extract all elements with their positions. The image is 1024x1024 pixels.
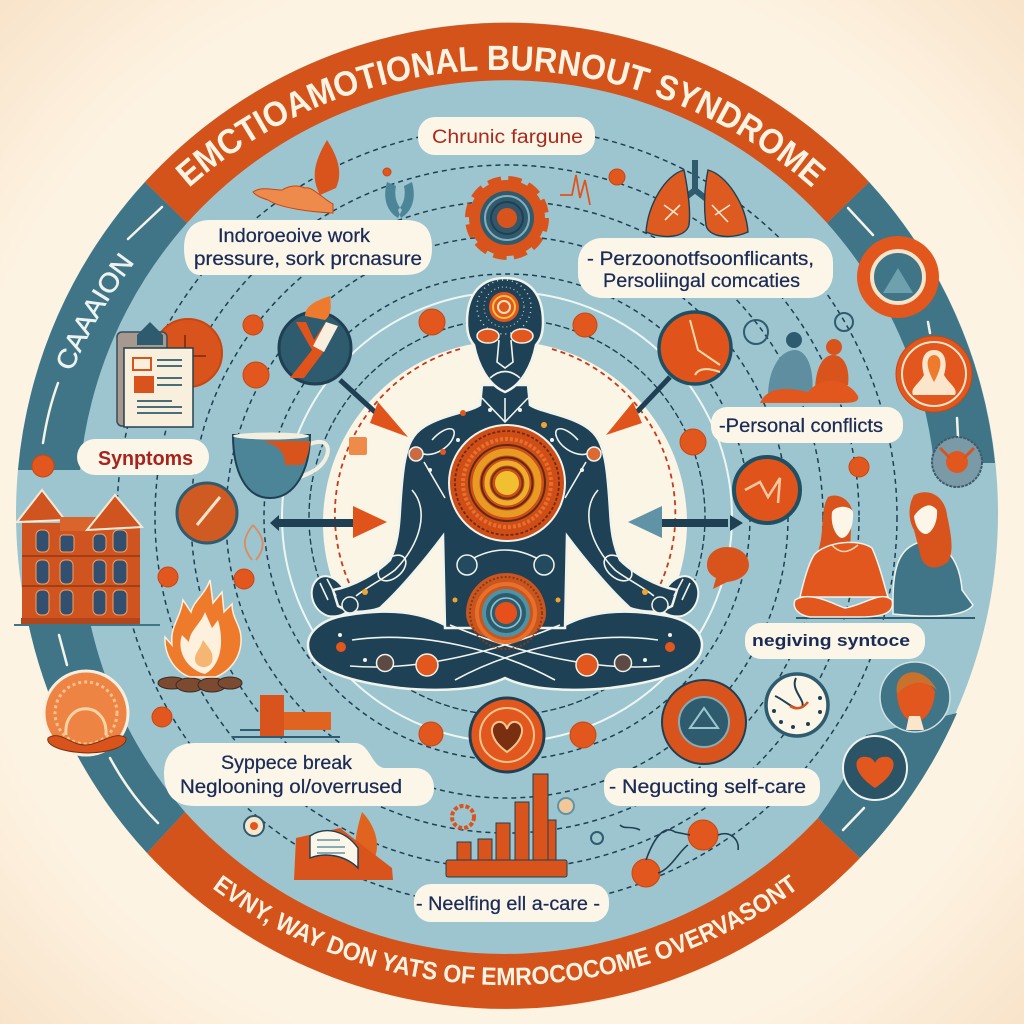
outer ring: left lower teal segment — [28, 622, 185, 853]
icon: ring medallion — [857, 236, 939, 318]
label: personal conflicts upper: - Perzoonotfsoonflicants, — [587, 249, 814, 270]
label: work pressure: Indoroeoive work — [218, 226, 371, 247]
legs — [308, 612, 702, 690]
connector squiggles — [620, 825, 738, 873]
central cream circle — [323, 341, 687, 640]
icon: clock and clipboard — [117, 319, 222, 427]
icon: magnifier lower right — [734, 457, 800, 523]
bottom band — [147, 812, 860, 1009]
label: personal conflicts: -Personal conflicts — [719, 416, 883, 437]
icon: small gear — [452, 806, 474, 828]
icon: seated couple — [760, 332, 858, 403]
icon: lungs — [646, 160, 748, 236]
label: neelfing: - Neelfing ell a-care - — [416, 894, 600, 915]
icon: heart medallion — [843, 736, 907, 800]
label: personal conflicts upper — [578, 238, 833, 298]
icon: portrait circle — [880, 662, 950, 732]
small orange nodes — [32, 168, 869, 887]
outer ring: right lower teal segment — [818, 713, 957, 858]
belly mandala — [466, 573, 546, 649]
head rings — [477, 280, 531, 334]
title: EMCTIOAMOTIONAL BURNOUT SYNDROME — [175, 46, 826, 188]
woman right — [893, 492, 973, 616]
title band — [145, 23, 869, 223]
icon: two women meditating — [794, 492, 975, 618]
icon: small rings — [244, 313, 853, 844]
body details — [342, 447, 668, 676]
icon: building — [14, 490, 160, 625]
arrow: right — [628, 506, 743, 538]
label: chronic fatigue — [418, 117, 595, 155]
label: personal conflicts — [711, 407, 903, 443]
icon: speech bubble — [707, 547, 749, 589]
icon: right magnifier — [637, 312, 731, 412]
label: neglecting overused: Syppece break — [221, 753, 353, 774]
icon: hand with flame — [253, 140, 339, 213]
label: neglecting self-care: - Negucting self-care — [609, 777, 806, 798]
label: symptoms: Synptoms — [98, 448, 193, 470]
icon: gear medallion — [662, 680, 746, 764]
icon: book with flame — [294, 812, 393, 880]
icon: gauge — [177, 483, 237, 543]
outer ring: right upper teal segment — [827, 182, 995, 463]
meditating figure — [308, 278, 702, 690]
label: neglecting overused: Neglooning ol/overrused — [180, 777, 402, 798]
icon: cog — [469, 180, 545, 256]
arrow: upper right — [606, 402, 642, 435]
label: symptoms — [77, 439, 209, 475]
chest mandala — [449, 425, 565, 541]
label: neelfing — [414, 884, 609, 922]
head — [467, 278, 543, 392]
icon: left magnifier with X — [279, 296, 375, 412]
label: chronic fatigue: Chrunic fargune — [432, 127, 583, 148]
arrow: upper left — [370, 402, 408, 437]
label: work pressure — [184, 220, 432, 275]
icon: small flame sprig — [245, 525, 263, 560]
label: negiving syntoce: negiving syntoce — [752, 631, 910, 650]
label: neglecting self-care — [604, 768, 820, 806]
left ring label: CAAAION — [58, 252, 134, 368]
label: work pressure: pressure, sork prcnasure — [194, 249, 422, 270]
icon: heart circle — [470, 698, 544, 772]
icon: campfire — [158, 580, 242, 692]
label: neglecting overused — [164, 743, 434, 806]
icon: person medallion — [896, 336, 972, 412]
small square marker — [349, 437, 367, 455]
face and chest lines — [320, 340, 690, 680]
icon: cup — [233, 432, 328, 498]
chart: bar chart — [446, 774, 567, 877]
icon: wheel — [932, 437, 982, 487]
outer ring: left upper teal segment — [18, 182, 187, 470]
woman left — [794, 495, 893, 617]
torso and arms — [333, 385, 677, 628]
icon: ekg — [560, 175, 590, 205]
eyes — [477, 329, 533, 343]
bottom band caption: EVNY, WAY DON YATS OF EMROCOCOME OVERVASONT — [213, 874, 795, 986]
icon: orange mallet — [232, 695, 340, 737]
icon: brain circle — [44, 671, 128, 755]
arrow: left — [270, 506, 387, 538]
hands — [312, 576, 698, 616]
label: negiving syntoce — [745, 623, 925, 659]
icon: chart badge — [558, 798, 574, 814]
label: personal conflicts upper: Persoliingal comcaties — [603, 271, 800, 292]
dashed red circle — [335, 349, 675, 585]
icon: clock — [766, 674, 828, 736]
icon: teal horseshoe — [385, 182, 414, 218]
